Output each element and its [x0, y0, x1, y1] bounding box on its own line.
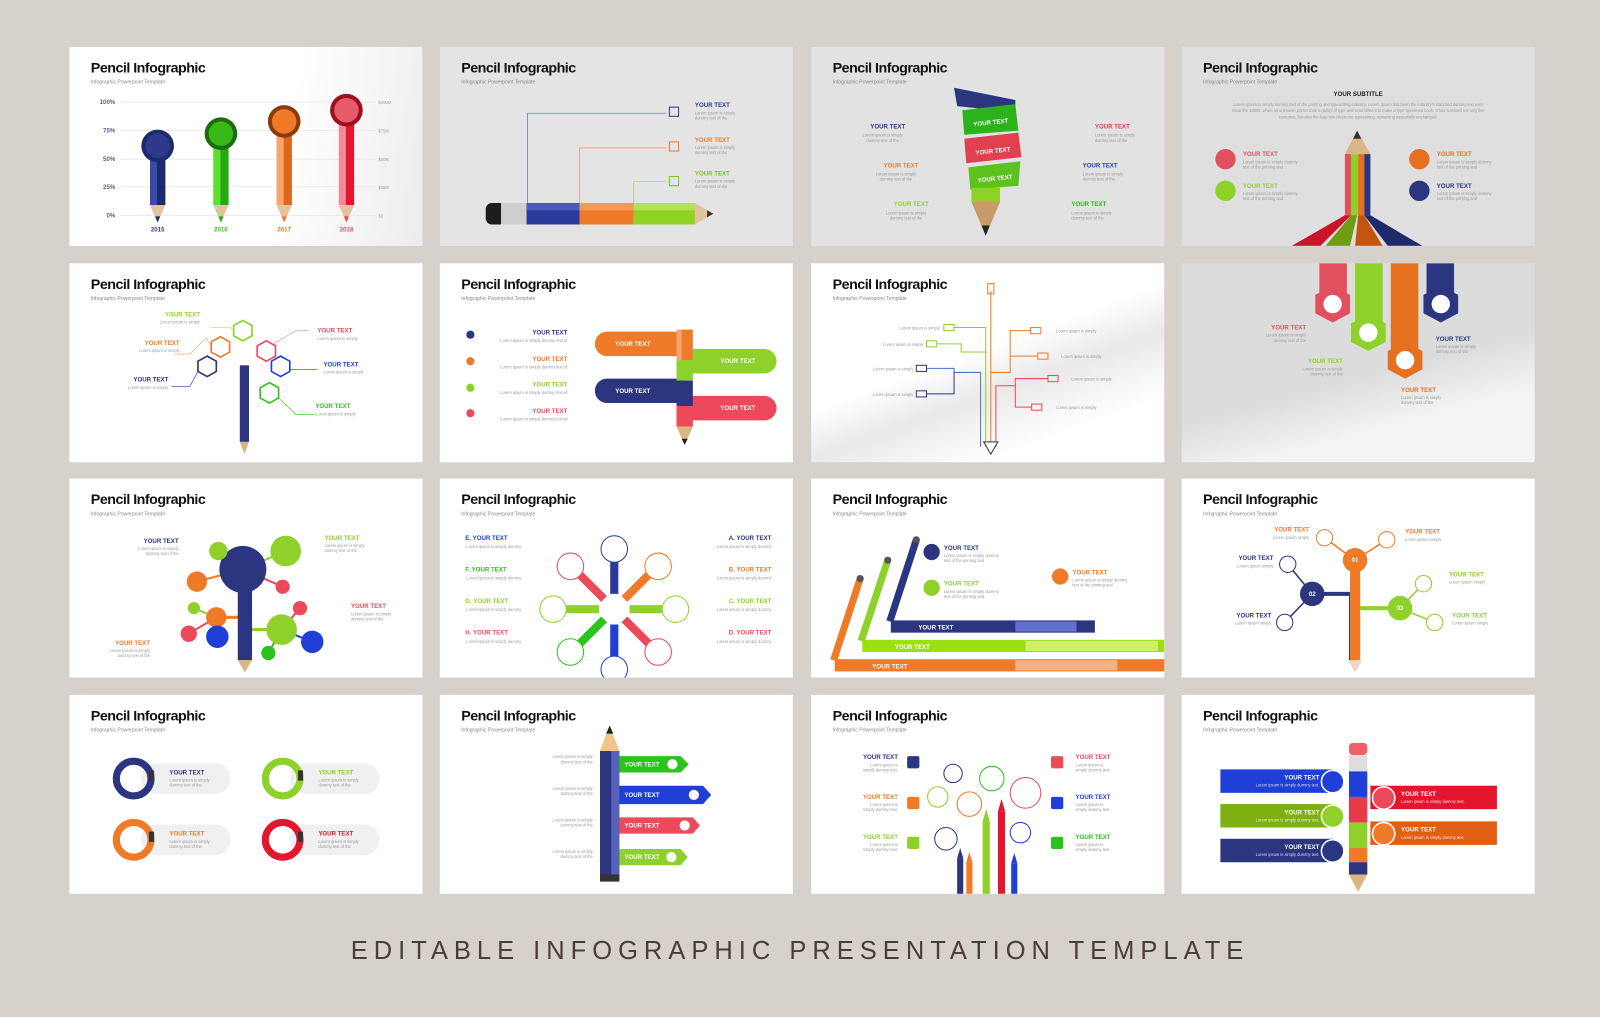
- labels: Lorem ipsum is simply: [110, 648, 151, 653]
- panel: diagonal pencils brush strokes: Pencil Infographic: [833, 492, 948, 508]
- panel: bar chart pencils: $0: [379, 213, 384, 218]
- bars: Lorem ipsum is simply dummy text.: [1256, 783, 1319, 788]
- bars: YOUR TEXT: [1284, 775, 1320, 782]
- labels: YOUR TEXT: [1401, 387, 1436, 394]
- labels: YOUR TEXT: [144, 538, 179, 545]
- labels: Lorem ipsum simply: [1235, 620, 1272, 625]
- labels: YOUR TEXT: [1238, 555, 1274, 562]
- labels: Lorem ipsum is simply: [1266, 333, 1307, 338]
- panel: ring pencils: Lorem ipsum is simply: [169, 839, 211, 844]
- panel: horizontal pencil: Lorem ipsum is simply: [695, 145, 736, 150]
- labels: Lorem ipsum is simply: [323, 369, 365, 374]
- side items: Lorem ipsum is: [870, 762, 898, 767]
- text items: Lorem ipsum is simply dummy: [1072, 578, 1128, 583]
- panel: banner pencil: [440, 263, 793, 462]
- labels: Lorem ipsum is simply: [128, 385, 169, 390]
- right texts: dummy text of the: [1095, 138, 1128, 143]
- panel: horizontal pencil: YOUR TEXT: [695, 137, 730, 144]
- items: text of the printing and: [1243, 164, 1283, 169]
- labels: YOUR TEXT: [1405, 529, 1440, 536]
- right texts: dummy text of the: [1083, 177, 1116, 182]
- pencil with rays: [1292, 131, 1422, 246]
- side items: Lorem ipsum is: [870, 842, 898, 847]
- footer title: EDITABLE INFOGRAPHIC PRESENTATION TEMPLATE: [351, 937, 1249, 965]
- panel: vertical pencil arrows: Infographic Powerpoint Template: [461, 728, 535, 734]
- labels: Lorem ipsum simply: [1405, 537, 1442, 542]
- panel: horizontal pencil: dummy text of the: [695, 150, 728, 155]
- left texts: dummy text of the: [890, 215, 923, 220]
- panel: hexagon pencil: Pencil Infographic: [91, 277, 206, 293]
- panel: branching pencil lines: Infographic Powerpoint Template: [833, 296, 907, 302]
- panel: bar chart pencils: [69, 47, 422, 246]
- labels: YOUR TEXT: [351, 603, 386, 610]
- text items: dummy text of the: [695, 115, 728, 120]
- items: YOUR TEXT: [1243, 151, 1278, 158]
- pencil 2018: 2018: [340, 227, 354, 234]
- strokes: [835, 620, 1171, 671]
- labels: YOUR TEXT: [1436, 336, 1471, 343]
- panel: vertical pencil arrows: dummy text of the: [560, 791, 594, 796]
- pencil banners: [595, 330, 777, 445]
- panel: horizontal pencil: Infographic Powerpoint Template: [461, 80, 535, 86]
- panel: branching pencil lines: Lorem ipsum is simply: [873, 392, 914, 397]
- arrows: YOUR TEXT: [624, 854, 660, 861]
- pencil banners: YOUR TEXT: [720, 358, 756, 365]
- panel: speech bubbles pencils: Pencil Infographic: [833, 708, 948, 724]
- panel: ring pencils: Infographic Powerpoint Template: [91, 728, 165, 734]
- side items: simply dummy text.: [863, 847, 898, 852]
- side items: YOUR TEXT: [863, 754, 898, 761]
- arrows: [619, 756, 711, 865]
- side items: simply dummy text.: [863, 767, 898, 772]
- labels: Lorem ipsum is simply dummy: [466, 576, 522, 581]
- bars: YOUR TEXT: [1401, 827, 1436, 834]
- text items: text of the printing and: [944, 558, 984, 563]
- ribbon pencil: YOUR TEXT: [975, 146, 1011, 157]
- bubbles: [928, 764, 1041, 850]
- labels: Lorem ipsum is simply: [139, 348, 181, 353]
- pencil 2016: 2016: [214, 227, 228, 234]
- panel: pencil rays top: since the 1500s, when an unknown printer took a galley of type and scrambled it to make a type specimen book. It has survived not only five: [1232, 108, 1485, 113]
- panel: circle network pencil: Pencil Infographic: [91, 492, 206, 508]
- labels: dummy text of the: [146, 551, 179, 556]
- labels: Lorem ipsum is simply: [317, 336, 359, 341]
- panel: branching pencil lines: Lorem ipsum is simply: [1061, 354, 1103, 359]
- labels: Lorem ipsum simply: [1449, 580, 1486, 585]
- panel: ring pencils: YOUR TEXT: [169, 831, 205, 838]
- right texts: YOUR TEXT: [1071, 201, 1107, 208]
- panel: circle network pencil: [69, 479, 422, 678]
- side items: YOUR TEXT: [863, 834, 898, 841]
- panel: bar chart pencils: $50M: [379, 157, 389, 162]
- text items: [669, 102, 736, 120]
- labels: YOUR TEXT: [1452, 612, 1487, 619]
- labels: Lorem ipsum is simply dummy: [466, 544, 522, 549]
- axis labels: 0%: [106, 212, 116, 219]
- axis labels: 75%: [103, 128, 116, 135]
- panel: bar chart pencils: Pencil Infographic: [91, 60, 206, 76]
- list: YOUR TEXT: [532, 330, 568, 337]
- panel: speech bubbles pencils: [811, 695, 1164, 894]
- arrows: YOUR TEXT: [624, 761, 660, 768]
- items: Lorem ipsum is simply dummy: [1243, 191, 1299, 196]
- text items: YOUR TEXT: [944, 545, 979, 552]
- text items: text of the printing and: [944, 594, 984, 599]
- left texts: YOUR TEXT: [884, 162, 919, 169]
- labels: Lorem ipsum is simply: [351, 611, 392, 616]
- items: text of the printing and: [1437, 196, 1477, 201]
- items: Lorem ipsum is simply dummy: [1243, 159, 1299, 164]
- labels: YOUR TEXT: [145, 340, 180, 347]
- labels: YOUR TEXT: [1308, 358, 1343, 365]
- bars: Lorem ipsum is simply dummy text.: [1401, 799, 1465, 804]
- panel: ring pencils: YOUR TEXT: [318, 769, 354, 776]
- labels: [128, 311, 365, 416]
- items: YOUR TEXT: [1437, 151, 1472, 158]
- left texts: Lorem ipsum is simply: [876, 172, 917, 177]
- panel: branching pencil lines: Lorem ipsum is simply: [1056, 329, 1097, 334]
- panel: horizontal pencil: [440, 47, 793, 246]
- labels: Lorem ipsum is simply: [160, 319, 201, 324]
- items: YOUR TEXT: [1437, 183, 1472, 190]
- right texts: YOUR TEXT: [1095, 124, 1130, 131]
- panel: ribbon pencil: Infographic Powerpoint Template: [833, 80, 907, 86]
- circles: [1321, 770, 1395, 862]
- axis labels: 50%: [103, 156, 116, 163]
- panel: branching pencil lines: [811, 263, 1164, 462]
- list: Lorem ipsum is simply dummy text of: [500, 364, 568, 369]
- labels: Lorem ipsum simply: [1452, 620, 1489, 625]
- panel: ring pencils: Lorem ipsum is simply: [318, 839, 360, 844]
- pencil: [240, 365, 249, 454]
- pencil 2017: [268, 105, 301, 234]
- text items: Lorem ipsum is simply: [695, 110, 736, 115]
- pencil 2016: [205, 117, 237, 234]
- panel: vertical pencil arrows: Lorem ipsum is simply: [553, 754, 594, 759]
- list: Lorem ipsum is simply dummy text of: [500, 390, 568, 395]
- panel: vertical pencil arrows: Lorem ipsum is simply: [553, 817, 594, 822]
- panel: radial pencils: Lorem ipsum is simply dummy: [717, 544, 772, 549]
- pencil banners: YOUR TEXT: [720, 405, 756, 412]
- side items: Lorem ipsum is: [1076, 802, 1103, 807]
- left texts: [862, 124, 929, 220]
- ribbon pencil: [954, 88, 1021, 236]
- panel: vertical pencil arrows: Pencil Infographic: [461, 708, 576, 724]
- side items: simply dummy text.: [863, 807, 898, 812]
- arrows: YOUR TEXT: [624, 823, 660, 830]
- text items: YOUR TEXT: [944, 581, 979, 588]
- panel: radial pencils: Lorem ipsum is simply dummy: [717, 607, 772, 612]
- labels: [110, 535, 392, 658]
- text items: text of the printing and: [1072, 583, 1113, 588]
- panel: diagonal pencils brush strokes: [811, 479, 1164, 678]
- panel: numbered tree: [1182, 479, 1535, 678]
- ribbons: [1315, 263, 1458, 379]
- tree: [1277, 530, 1443, 672]
- labels: dummy text of the: [1436, 349, 1469, 354]
- bars: YOUR TEXT: [1401, 791, 1436, 798]
- labels: dummy text of the: [351, 616, 384, 621]
- panel: pencil with bars: [1182, 695, 1535, 894]
- bars: Lorem ipsum is simply dummy text.: [1401, 835, 1465, 840]
- panel: radial pencils: D. YOUR TEXT: [729, 630, 772, 637]
- tree: 01: [1352, 557, 1359, 564]
- ribbon pencil: YOUR TEXT: [973, 118, 1009, 128]
- tree: 03: [1397, 605, 1404, 612]
- panel: horizontal pencil: Lorem ipsum is simply: [695, 179, 736, 184]
- panel: ribbon pencil: [811, 47, 1164, 246]
- side items: YOUR TEXT: [1076, 834, 1111, 841]
- panel: branching pencil lines: Lorem ipsum is simply: [899, 326, 941, 331]
- text items: Lorem ipsum is simply dummy: [944, 553, 1000, 558]
- panel: diagonal pencils brush strokes: Infographic Powerpoint Template: [833, 511, 907, 517]
- panel: horizontal pencil: Pencil Infographic: [461, 60, 576, 76]
- pencil 2017: 2017: [277, 227, 292, 234]
- labels: E. YOUR TEXT: [465, 535, 508, 542]
- panel: banner pencil: Pencil Infographic: [461, 277, 576, 293]
- labels: [465, 535, 522, 644]
- side items: simply dummy text.: [1076, 807, 1110, 812]
- panel: vertical pencil arrows: dummy text of the: [560, 854, 594, 859]
- pencil banners: YOUR TEXT: [615, 388, 651, 395]
- panel: branching pencil lines: Lorem ipsum is simply: [883, 342, 924, 347]
- labels: Lorem ipsum is simply dummy: [466, 607, 522, 612]
- panel: pencil rays top: YOUR SUBTITLE: [1334, 91, 1383, 98]
- axis labels: 25%: [103, 184, 116, 191]
- items: Lorem ipsum is simply dummy: [1437, 191, 1493, 196]
- labels: YOUR TEXT: [1271, 325, 1306, 332]
- panel: ring pencils: dummy text of the: [169, 783, 203, 788]
- right texts: dummy text of the: [1071, 215, 1105, 220]
- bars: Lorem ipsum is simply dummy text.: [1256, 817, 1319, 822]
- labels: Lorem ipsum is simply: [324, 543, 366, 548]
- panel: pencil rays top: Lorem ipsum is simply dummy text of the printing and typesetting industry. Lorem Ipsum has been the industry's standard dummy text ever: [1233, 102, 1484, 107]
- labels: YOUR TEXT: [133, 377, 169, 384]
- panel: circle network pencil: Infographic Powerpoint Template: [91, 511, 165, 517]
- radial: [564, 557, 664, 661]
- hexagons: [198, 320, 290, 403]
- panel: pencil rays top: Infographic Powerpoint Template: [1203, 80, 1277, 86]
- side items: YOUR TEXT: [1076, 794, 1111, 801]
- labels: Lorem ipsum simply: [1237, 563, 1274, 568]
- labels: dummy text of the: [1310, 372, 1344, 377]
- labels: Lorem ipsum simply: [1273, 535, 1310, 540]
- pencils: [957, 799, 1017, 894]
- panel: vertical pencil arrows: Lorem ipsum is simply: [553, 849, 594, 854]
- panel: radial pencils: Pencil Infographic: [461, 492, 576, 508]
- side items: Lorem ipsum is: [1076, 842, 1103, 847]
- panel: radial pencils: Lorem ipsum is simply dummy: [717, 639, 772, 644]
- panel: bar chart pencils: $75M: [379, 129, 389, 134]
- labels: Lorem ipsum is simply: [315, 411, 357, 416]
- side items: simply dummy text.: [1076, 767, 1110, 772]
- list: YOUR TEXT: [532, 382, 568, 389]
- panel: numbered tree: Pencil Infographic: [1203, 492, 1318, 508]
- side items: YOUR TEXT: [1076, 754, 1111, 761]
- panel: horizontal pencil: YOUR TEXT: [695, 171, 730, 178]
- pills: [141, 763, 380, 855]
- labels: H. YOUR TEXT: [465, 630, 508, 637]
- right texts: Lorem ipsum is simply: [1083, 172, 1124, 177]
- left texts: Lorem ipsum is simply: [886, 210, 927, 215]
- left texts: dummy text of the: [880, 177, 913, 182]
- bars: YOUR TEXT: [1284, 844, 1320, 851]
- panel: vertical pencil arrows: dummy text of the: [560, 759, 594, 764]
- left texts: YOUR TEXT: [894, 201, 929, 208]
- list: Lorem ipsum is simply dummy text of: [500, 416, 568, 421]
- pencil banners: YOUR TEXT: [615, 341, 651, 348]
- panel: ring pencils: [69, 695, 422, 894]
- items: YOUR TEXT: [1243, 183, 1278, 190]
- right texts: [1071, 124, 1136, 220]
- bars: [1220, 769, 1497, 862]
- labels: Lorem ipsum is simply dummy: [466, 639, 522, 644]
- labels: dummy text of the: [324, 548, 358, 553]
- panel: pencil ribbons with hexagons: [1182, 263, 1535, 462]
- labels: Lorem ipsum is simply: [1303, 366, 1344, 371]
- panel: branching pencil lines: Lorem ipsum is simply: [1056, 405, 1097, 410]
- items: [1215, 149, 1493, 201]
- side items: YOUR TEXT: [863, 794, 898, 801]
- panel: ring pencils: Lorem ipsum is simply: [318, 778, 360, 783]
- labels: YOUR TEXT: [1274, 527, 1309, 534]
- text items: Lorem ipsum is simply dummy: [944, 589, 1000, 594]
- network: [181, 536, 323, 672]
- panel: bar chart pencils: Infographic Powerpoint Template: [91, 80, 165, 86]
- axis labels: 100%: [100, 99, 116, 106]
- panel: horizontal pencil: dummy text of the: [695, 184, 728, 189]
- labels: YOUR TEXT: [165, 311, 200, 318]
- leaves: [916, 324, 1058, 410]
- bars: Lorem ipsum is simply dummy text.: [1256, 852, 1319, 857]
- right texts: YOUR TEXT: [1083, 162, 1118, 169]
- tree lines: [927, 284, 1048, 454]
- panel: banner pencil: Infographic Powerpoint Template: [461, 296, 535, 302]
- labels: YOUR TEXT: [324, 535, 360, 542]
- panel: ring pencils: dummy text of the: [318, 783, 352, 788]
- panel: pencil rays top: centuries, but also the leap into electronic typesetting, remaining essentially unchanged.: [1279, 114, 1438, 119]
- panel: ring pencils: dummy text of the: [169, 844, 203, 849]
- panel: ribbon pencil: Pencil Infographic: [833, 60, 948, 76]
- panel: branching pencil lines: Lorem ipsum is simply: [1071, 377, 1113, 382]
- panel: ring pencils: Pencil Infographic: [91, 708, 206, 724]
- text items: YOUR TEXT: [1072, 569, 1108, 576]
- panel: ring pencils: dummy text of the: [318, 844, 352, 849]
- pencil 2018: [330, 94, 363, 234]
- pencil 2015: 2015: [151, 227, 165, 234]
- side items: [863, 754, 1111, 852]
- bars: YOUR TEXT: [1284, 809, 1320, 816]
- pencil 2015: [141, 130, 174, 234]
- labels: dummy text of the: [118, 653, 151, 658]
- right texts: Lorem ipsum is simply: [1071, 210, 1113, 215]
- panel: ring pencils: YOUR TEXT: [169, 769, 205, 776]
- pencils: [834, 536, 920, 660]
- rings: [116, 761, 300, 857]
- arrows: YOUR TEXT: [624, 792, 660, 799]
- labels: dummy text of the: [1274, 338, 1307, 343]
- left texts: YOUR TEXT: [870, 124, 905, 131]
- strokes: YOUR TEXT: [918, 625, 954, 632]
- list: YOUR TEXT: [532, 356, 568, 363]
- labels: Lorem ipsum is simply: [138, 546, 180, 551]
- strokes: YOUR TEXT: [872, 663, 908, 670]
- panel: pencil rays top: [1182, 47, 1535, 246]
- panel: vertical pencil arrows: Lorem ipsum is simply: [553, 786, 594, 791]
- list: [466, 330, 568, 421]
- panel: radial pencils: Lorem ipsum is simply dummy: [717, 576, 772, 581]
- side items: Lorem ipsum is: [1076, 762, 1103, 767]
- panel: vertical pencil arrows: dummy text of the: [560, 823, 594, 828]
- panel: radial pencils: [440, 479, 793, 678]
- pencil: [1349, 743, 1367, 892]
- panel: speech bubbles pencils: Infographic Powerpoint Template: [833, 728, 907, 734]
- left texts: dummy text of the: [866, 138, 900, 143]
- panel: pencil rays top: Pencil Infographic: [1203, 60, 1318, 76]
- panel: hexagon pencil: Infographic Powerpoint Template: [91, 296, 165, 302]
- panel: branching pencil lines: Lorem ipsum is simply: [873, 366, 914, 371]
- panel: pencil with bars: Pencil Infographic: [1203, 708, 1318, 724]
- pencil: [486, 203, 713, 224]
- labels: [1235, 527, 1489, 625]
- side items: Lorem ipsum is: [870, 802, 898, 807]
- labels: YOUR TEXT: [317, 328, 353, 335]
- labels: [1266, 325, 1477, 405]
- tree: 02: [1309, 591, 1316, 598]
- left texts: Lorem ipsum is simply: [862, 133, 904, 138]
- ribbon pencil: YOUR TEXT: [977, 174, 1013, 184]
- list: YOUR TEXT: [532, 408, 568, 415]
- panel: radial pencils: Infographic Powerpoint Template: [461, 511, 535, 517]
- right texts: Lorem ipsum is simply: [1095, 133, 1136, 138]
- pencil: [600, 726, 619, 882]
- labels: Lorem ipsum is simply: [1436, 344, 1477, 349]
- panel: vertical pencil arrows: [440, 695, 793, 894]
- panel: hexagon pencil: [69, 263, 422, 462]
- items: text of the printing and: [1243, 196, 1283, 201]
- labels: YOUR TEXT: [1449, 572, 1484, 579]
- labels: YOUR TEXT: [115, 640, 150, 647]
- panel: ring pencils: YOUR TEXT: [318, 831, 354, 838]
- panel: pencil with bars: Infographic Powerpoint Template: [1203, 728, 1277, 734]
- labels: YOUR TEXT: [1236, 612, 1272, 619]
- strokes: YOUR TEXT: [895, 644, 930, 651]
- items: text of the printing and: [1437, 164, 1477, 169]
- side items: simply dummy text.: [1076, 847, 1110, 852]
- labels: dummy text of the: [1401, 400, 1434, 405]
- panel: radial pencils: C. YOUR TEXT: [729, 598, 772, 605]
- text items: YOUR TEXT: [695, 102, 730, 109]
- labels: Lorem ipsum is simply: [1401, 395, 1442, 400]
- panel: bar chart pencils: $100M: [379, 100, 392, 105]
- labels: YOUR TEXT: [315, 403, 351, 410]
- axis labels: [100, 99, 116, 219]
- labels: F. YOUR TEXT: [465, 566, 507, 573]
- panel: radial pencils: B. YOUR TEXT: [729, 566, 772, 573]
- panel: branching pencil lines: Pencil Infographic: [833, 277, 948, 293]
- labels: G. YOUR TEXT: [465, 598, 509, 605]
- panel: bar chart pencils: $25M: [379, 185, 389, 190]
- text items: [923, 544, 1128, 599]
- labels: YOUR TEXT: [323, 361, 359, 368]
- items: Lorem ipsum is simply dummy: [1437, 159, 1493, 164]
- panel: numbered tree: Infographic Powerpoint Template: [1203, 511, 1277, 517]
- panel: ring pencils: Lorem ipsum is simply: [169, 778, 211, 783]
- list: Lorem ipsum is simply dummy text of: [500, 338, 568, 343]
- panel: radial pencils: A. YOUR TEXT: [729, 535, 772, 542]
